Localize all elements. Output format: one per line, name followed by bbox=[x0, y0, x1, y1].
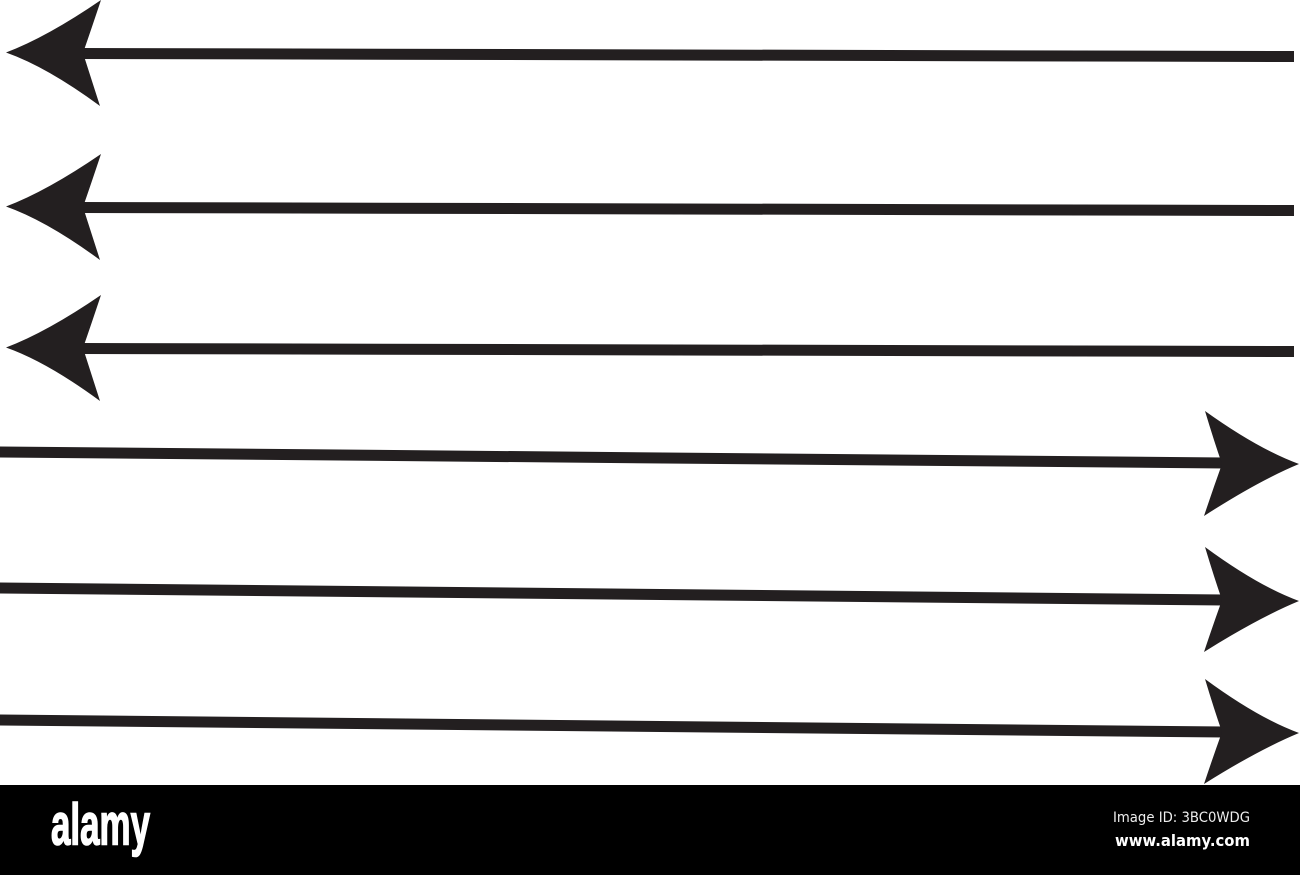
image id: Image ID: 3BC0WDG bbox=[1113, 810, 1250, 826]
arrow 4: pointing right bbox=[0, 411, 1299, 516]
website url: www.alamy.com bbox=[1115, 831, 1250, 850]
arrow 1: pointing left bbox=[6, 0, 1294, 106]
arrow 2: pointing left bbox=[6, 154, 1294, 260]
arrow 6: pointing right bbox=[0, 679, 1299, 784]
arrow 5: pointing right bbox=[0, 547, 1299, 652]
footer banner bbox=[0, 785, 1300, 875]
arrow 3: pointing left bbox=[6, 295, 1294, 401]
alamy logo: alamy bbox=[51, 792, 150, 858]
